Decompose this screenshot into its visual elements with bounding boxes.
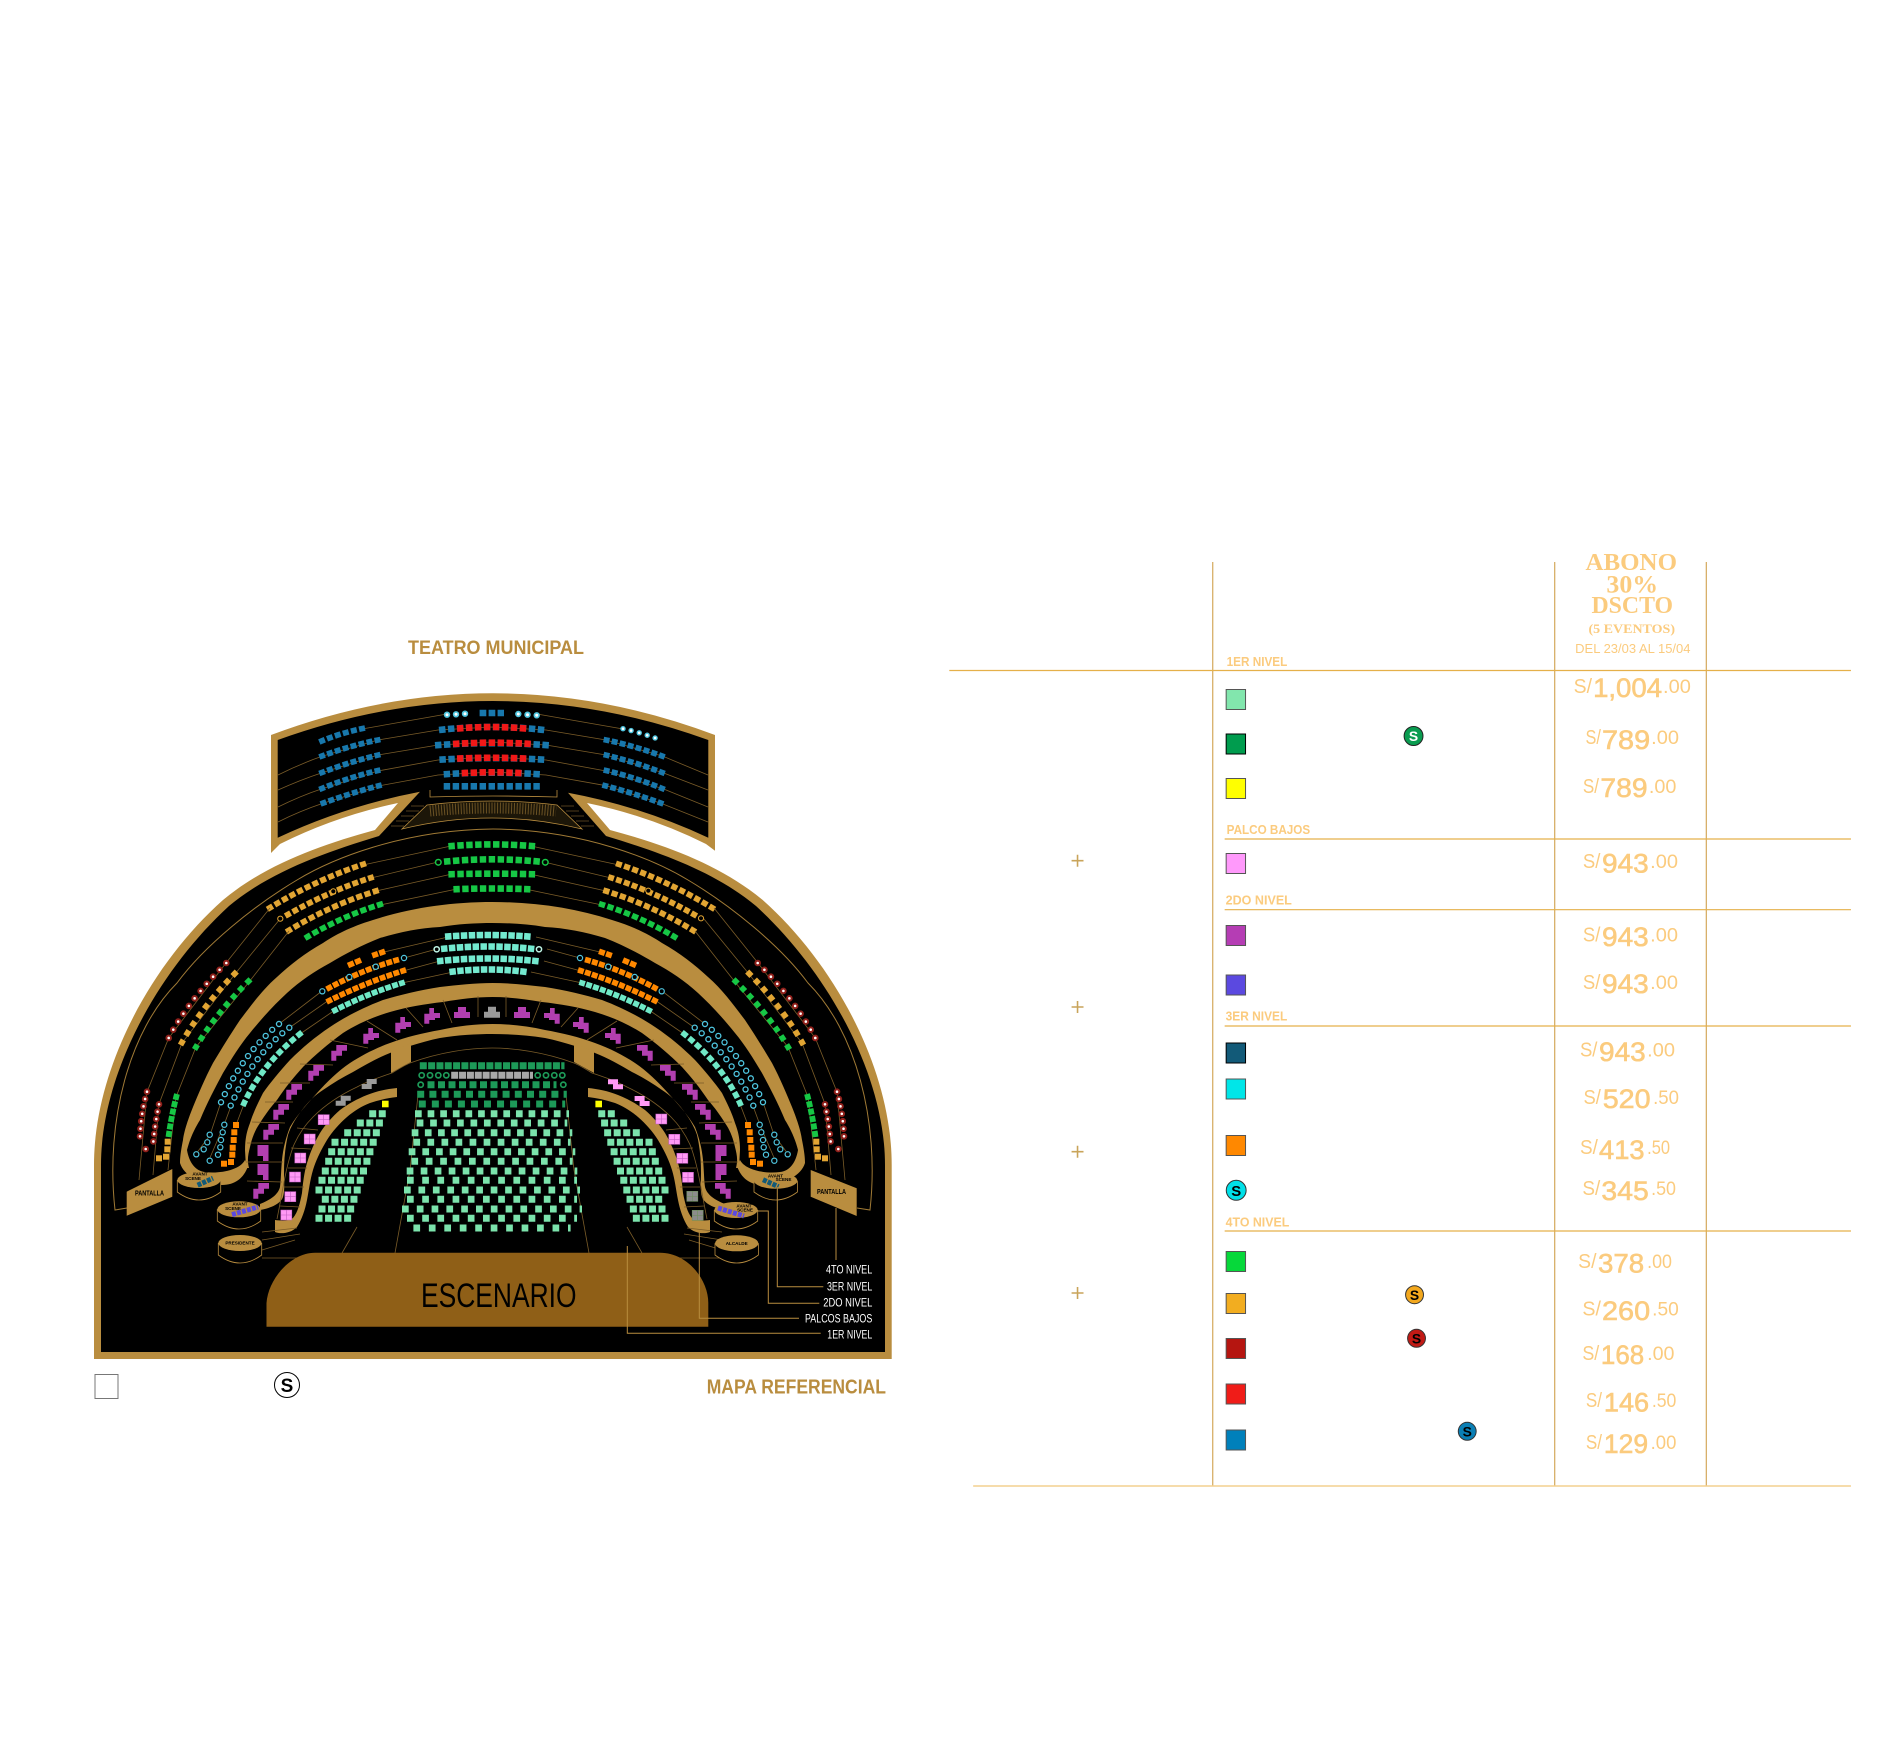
S badge orange [1406,1286,1423,1304]
level labels [805,1262,873,1341]
price 168 [1582,1340,1674,1370]
outer rows red seats [140,963,226,1157]
balcony left top row [319,728,365,742]
bright outline of 4th level [113,829,872,1210]
balcony centre seats [435,713,549,786]
section labels: PALCO BAJOS [1227,822,1310,837]
map note: MAPA REFERENCIAL [707,1376,886,1398]
price 345.50 [1582,1176,1676,1206]
price 520.50 [1584,1084,1679,1114]
avant scene right inner [714,1202,758,1229]
price 378: S/ [1578,1251,1597,1273]
table header: abono [1575,550,1691,656]
level labels: 3ER NIVEL [827,1279,873,1293]
price 1004: .00 [1663,677,1691,698]
price 129: S/ [1586,1432,1602,1454]
price 520.50: S/ [1584,1087,1601,1109]
price 1004: S/ [1574,676,1592,698]
palcos bajos boxes right [656,1114,703,1220]
mirrored right bands [492,902,805,1233]
4th level centre seats [444,844,540,889]
price 943 second level: 943 [1602,922,1649,952]
gold pillar [391,1043,411,1073]
stage [266,1253,708,1327]
stage: ESCENARIO [421,1277,576,1315]
price 168: .00 [1647,1344,1674,1365]
level guide lines [139,908,492,1258]
price 943 palco: 943 [1602,849,1649,879]
price 520.50: .50 [1653,1088,1679,1109]
2nd level purple boxes [253,1007,470,1199]
price 943 second level: .00 [1650,926,1678,947]
pantalla right [811,1170,857,1216]
mirrored 4th level rows right [525,846,715,938]
price table [949,550,1851,1486]
pantalla right: PANTALLA [817,1187,846,1196]
gold band between 4th and 3rd level [180,902,493,1185]
table header: abono: 30% [1606,571,1658,599]
alcalde seat: ALCALDE [726,1241,748,1246]
price 260.50: 260 [1602,1296,1650,1326]
plus signs [1072,855,1084,1299]
3rd level circle centres [221,1024,289,1106]
map silhouette [94,693,892,1359]
price 1004: 1,004 [1593,673,1662,703]
section labels [1226,654,1310,1230]
3rd level circle rows [221,1024,289,1106]
prices [1574,673,1691,1459]
price 789 yellow: S/ [1583,776,1599,798]
price 146.50: S/ [1586,1390,1602,1412]
S badge green: S [1409,728,1418,744]
S badge blue [1458,1422,1476,1440]
legend box [95,1374,118,1398]
price 789: .00 [1651,728,1679,749]
price 943 second level [1583,922,1678,952]
3rd level mint side row [243,1032,302,1106]
title: TEATRO MUNICIPAL [408,638,584,659]
price 260.50: S/ [1582,1299,1601,1321]
price 943 avant scene: S/ [1583,972,1601,994]
table header: abono: ABONO [1586,550,1677,576]
price 943 avant scene: 943 [1602,969,1649,999]
avant scene right inner: AVANT [736,1204,752,1208]
table header: abono: DEL 23/03 AL 15/04 [1575,642,1691,656]
3rd level lower circles [194,1122,227,1163]
price 146.50: 146 [1604,1388,1649,1418]
seating map [94,693,892,1359]
S badge green [1404,726,1423,746]
presidente seat [218,1235,262,1263]
1st level centre circles [418,1073,566,1087]
balcony side seats [319,740,382,804]
mirrored half seats [139,740,492,1258]
price 789: S/ [1586,727,1601,749]
level labels: 2DO NIVEL [823,1295,873,1309]
price 345.50: .50 [1651,1179,1676,1200]
avant scene left outer: SCENE [185,1176,201,1181]
price 943 third level: .00 [1647,1041,1675,1062]
2nd level centre box [484,1007,500,1018]
avant scene left inner: AVANT [232,1202,248,1207]
price 378: 378 [1598,1249,1644,1279]
price 168: 168 [1601,1340,1644,1370]
price 789 [1586,725,1679,755]
price 413.50 [1580,1135,1670,1165]
gold band around palcos bajos [275,1088,397,1233]
price table lines [949,562,1851,1486]
pantalla left [127,1169,172,1216]
avant scene right inner: SCENE [737,1207,753,1212]
price 943 palco: S/ [1583,851,1601,873]
section labels: 1ER NIVEL [1227,654,1287,669]
price 129: .00 [1651,1433,1676,1454]
gold band between 3rd and 2nd level [245,983,493,1168]
price 168: S/ [1582,1343,1600,1365]
level labels: 1ER NIVEL [827,1327,873,1341]
price 413.50: S/ [1580,1137,1598,1159]
3rd level lower orange seats [221,1122,239,1167]
price 943 avant scene: .00 [1650,973,1678,994]
price 129 [1586,1429,1676,1459]
price 943 third level: S/ [1580,1040,1598,1062]
avant scene left inner [217,1201,261,1229]
avant scene left outer [177,1172,221,1200]
palco pairs gray left [336,1079,377,1106]
price 378: .00 [1647,1252,1672,1273]
3rd level centre seats [437,935,539,972]
stairs [391,790,594,829]
S badge cyan [1226,1180,1246,1200]
table header: abono: (5 EVENTOS) [1589,621,1675,636]
pantalla left: PANTALLA [135,1189,164,1198]
S badge orange: S [1410,1287,1419,1303]
price 378 [1578,1249,1672,1279]
price 789 yellow: .00 [1649,777,1676,798]
price 943 palco: .00 [1650,852,1678,873]
price 943 third level [1580,1037,1675,1067]
price 129: 129 [1604,1429,1648,1459]
price 789 yellow [1583,773,1676,803]
price 1004 [1574,673,1691,703]
price 146.50: .50 [1652,1391,1676,1412]
price 345.50: S/ [1582,1178,1601,1200]
palco pairs pink right [608,1079,650,1106]
price 260.50 [1582,1296,1679,1326]
4th level circles [278,860,704,921]
palcos bajos boxes left [281,1115,329,1220]
avant scene left outer: AVANT [192,1172,208,1176]
price 789: 789 [1602,725,1650,755]
3rd level side circles [320,955,407,994]
3rd level side orange rows [327,951,406,1012]
legend S circle [274,1372,300,1398]
avant scene right outer [754,1173,797,1200]
colour swatches [1226,690,1246,1450]
price 345.50: 345 [1601,1176,1649,1206]
outer rows red seat centres [140,963,226,1157]
price 260.50: .50 [1652,1300,1679,1321]
S badge red [1408,1329,1425,1347]
S badge cyan: S [1231,1183,1241,1200]
avant scene left inner: SCENE [225,1206,241,1211]
balcony circle seats [447,714,663,741]
price 413.50: .50 [1647,1138,1670,1159]
price 789 yellow: 789 [1600,773,1648,803]
1st level centre seats [402,1114,582,1228]
avant scene right outer: SCENE [776,1177,791,1182]
price 943 palco [1583,849,1678,879]
mirrored 4th level side rows [267,846,457,938]
S badge red: S [1412,1330,1421,1347]
4th level side seats [267,863,383,938]
1st level side seats [316,1114,386,1218]
price 943 third level: 943 [1599,1037,1646,1067]
section labels: 3ER NIVEL [1226,1009,1287,1024]
4th level side guide lines [363,846,457,905]
section labels: 4TO NIVEL [1226,1215,1289,1230]
price 413.50: 413 [1599,1135,1645,1165]
avant scene right outer: AVANT [768,1174,783,1179]
price 146.50 [1586,1388,1676,1418]
mirrored band structure [180,902,493,1233]
level labels: PALCOS BAJOS [805,1311,872,1325]
3rd level centre circles [434,947,542,952]
outer rows gold and green [168,972,250,1137]
alcalde seat [715,1235,758,1263]
section labels: 2DO NIVEL [1226,893,1292,908]
1st level centre dark rows [417,1066,567,1104]
level labels: 4TO NIVEL [826,1262,873,1276]
S badge blue: S [1463,1423,1472,1440]
leader lines [627,1187,836,1333]
gold band between 2nd level and palcos [260,1024,493,1210]
legend S circle: S [281,1376,293,1397]
balcony guide lines [278,714,708,822]
outer rows gold end seats [156,1139,171,1161]
price 520.50: 520 [1603,1084,1651,1114]
price 943 avant scene [1583,969,1678,999]
yellow seat [382,1101,389,1107]
presidente seat: PRESIDENTE [225,1241,255,1246]
table header: abono: DSCTO [1591,593,1673,619]
mirrored right seats [492,740,845,1258]
map black background [101,701,885,1352]
price 943 second level: S/ [1583,925,1601,947]
